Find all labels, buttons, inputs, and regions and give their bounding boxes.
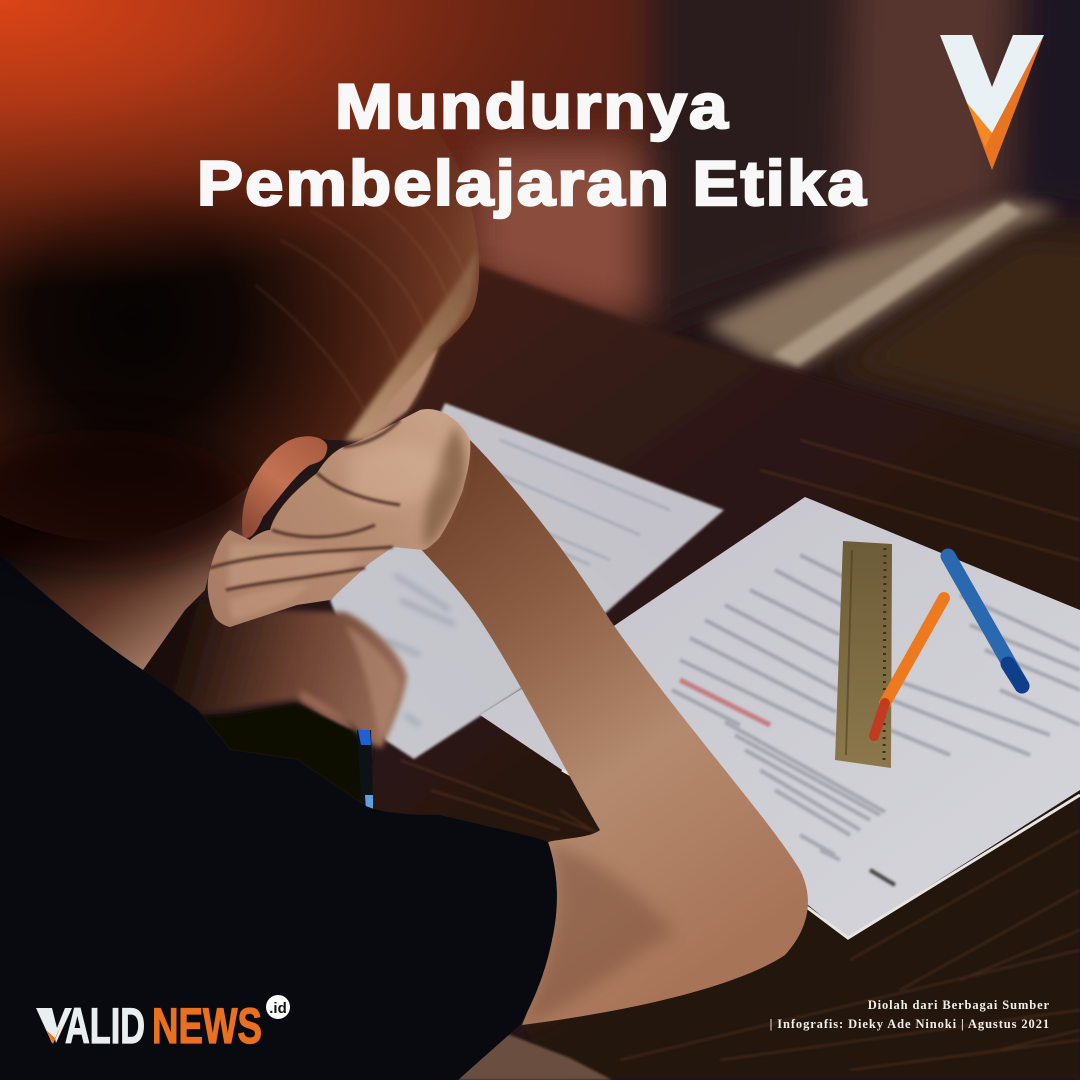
ruler: [835, 541, 892, 768]
title: Pembelajaran Etika: [197, 149, 868, 219]
logo: V mark: [940, 35, 1044, 170]
logo: VALIDNEWS wordmark: ALID: [65, 998, 145, 1054]
forearm and elbow: [420, 440, 808, 1025]
logo: VALIDNEWS wordmark: [36, 995, 290, 1054]
hand supporting head: [208, 409, 470, 627]
paper: front sheet with printed text: [480, 497, 1080, 938]
source credit: [770, 998, 1050, 1031]
ear: [242, 436, 327, 538]
neck: [0, 480, 250, 670]
orange pen: [874, 598, 944, 736]
source credit: Diolah dari Berbagai Sumber: [868, 998, 1050, 1012]
lower hand holding pen: [130, 600, 407, 810]
bottom floor sliver: [458, 1028, 612, 1080]
paper: back sheet: [330, 403, 724, 759]
table surface: [370, 262, 1080, 1080]
blue pen: [948, 556, 1022, 686]
title: Mundurnya: [335, 72, 730, 142]
source credit: | Infografis: Dieky Ade Ninoki | Agustus 2021: [770, 1017, 1050, 1031]
arm shadow detail: [522, 842, 675, 1025]
hair: [0, 150, 480, 589]
logo: VALIDNEWS wordmark: .id: [269, 1000, 287, 1017]
top-left orange overlay: [0, 0, 1080, 400]
shirt: [0, 555, 557, 1080]
title: [197, 72, 868, 219]
logo: VALIDNEWS wordmark: NEWS: [152, 998, 262, 1054]
